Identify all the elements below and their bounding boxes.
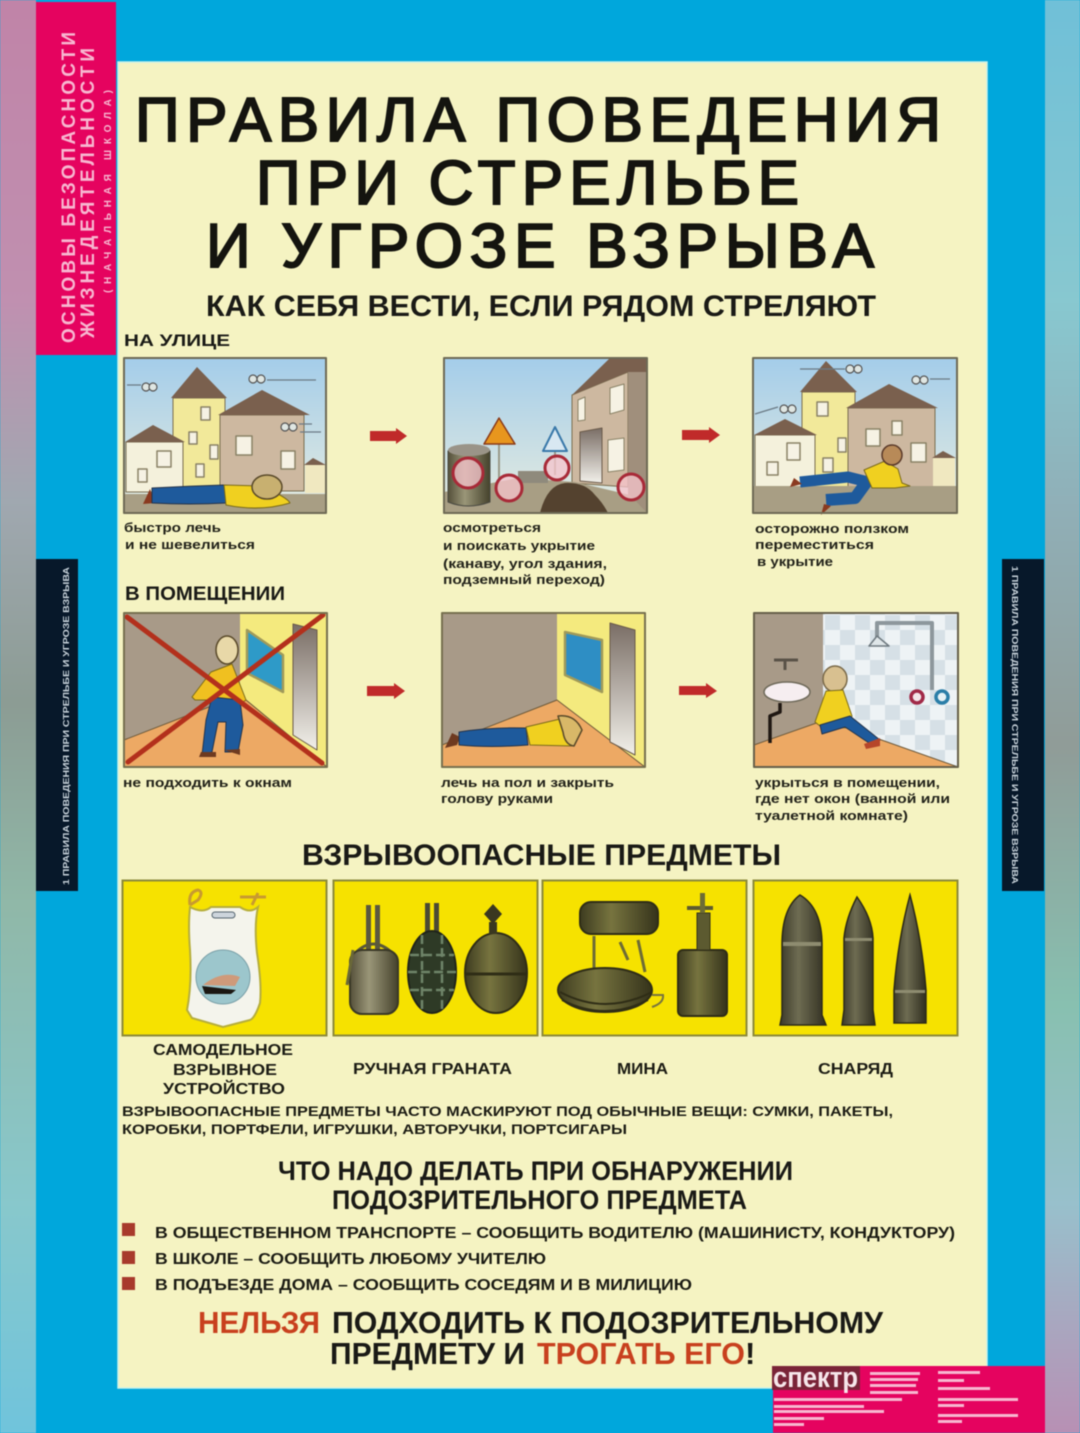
caption: look for cover: осмотреться bbox=[443, 520, 541, 535]
arrow bbox=[370, 428, 407, 444]
caption: lie down: и не шевелиться bbox=[125, 537, 255, 552]
warning text: ! bbox=[745, 1336, 755, 1371]
background: side gradient right bbox=[1045, 0, 1080, 1433]
publisher block bbox=[772, 1362, 1045, 1433]
title: ПРАВИЛА ПОВЕДЕНИЯ bbox=[135, 86, 941, 155]
caption: look for cover bbox=[443, 520, 607, 587]
heading: what to do: ПОДОЗРИТЕЛЬНОГО ПРЕДМЕТА bbox=[332, 1185, 747, 1215]
caption: lie on floor bbox=[441, 775, 614, 806]
panel: indoors, do not approach window bbox=[124, 613, 327, 767]
heading: indoors: В ПОМЕЩЕНИИ bbox=[125, 584, 285, 605]
caption: look for cover: подземный переход) bbox=[443, 572, 605, 587]
side tab: course name: (НАЧАЛЬНАЯ ШКОЛА) bbox=[103, 90, 114, 293]
labels: explosive objects bbox=[153, 1042, 894, 1098]
caption: bathroom: туалетной комнате) bbox=[755, 808, 908, 823]
labels: explosive objects: ВЗРЫВНОЕ bbox=[173, 1062, 277, 1079]
background: side gradient left bbox=[0, 0, 37, 1433]
list: what to do: В ШКОЛЕ – СООБЩИТЬ ЛЮБОМУ УЧИТЕЛЮ bbox=[155, 1251, 546, 1268]
panel: street, crawl bbox=[752, 358, 957, 515]
caption: crawl: осторожно ползком bbox=[755, 521, 909, 536]
panel: hand grenades bbox=[334, 880, 538, 1036]
heading: outdoors: НА УЛИЦЕ bbox=[124, 331, 230, 350]
side tab: left dark label: 1 ПРАВИЛА ПОВЕДЕНИЯ ПРИ СТРЕЛЬБЕ И УГРОЗЕ ВЗРЫВА bbox=[62, 567, 71, 885]
panel: indoors, bathroom bbox=[754, 613, 958, 767]
panel: street, look for cover bbox=[444, 358, 647, 513]
arrow bbox=[367, 683, 405, 699]
list: what to do: В ПОДЪЕЗДЕ ДОМА – СООБЩИТЬ СОСЕДЯМ И В МИЛИЦИЮ bbox=[155, 1277, 692, 1294]
warning text: ПОДХОДИТЬ К ПОДОЗРИТЕЛЬНОМУ bbox=[332, 1305, 884, 1340]
note: disguised objects: КОРОБКИ, ПОРТФЕЛИ, ИГРУШКИ, АВТОРУЧКИ, ПОРТСИГАРЫ bbox=[122, 1121, 627, 1137]
caption: lie on floor: лечь на пол и закрыть bbox=[441, 775, 614, 790]
caption: do not approach window: не подходить к окнам bbox=[123, 775, 292, 790]
labels: explosive objects: МИНА bbox=[617, 1061, 668, 1078]
panel: improvised device bbox=[122, 880, 326, 1036]
title: ПРИ СТРЕЛЬБЕ bbox=[256, 149, 799, 218]
panel: street, lie down bbox=[124, 358, 326, 513]
caption: lie down: быстро лечь bbox=[124, 520, 221, 535]
side tab: course name: ЖИЗНЕДЕЯТЕЛЬНОСТИ bbox=[78, 48, 99, 339]
caption: lie down bbox=[124, 520, 255, 552]
panel: shells bbox=[754, 880, 958, 1036]
side tab: course name bbox=[36, 2, 116, 355]
caption: bathroom bbox=[755, 775, 950, 823]
panel: mines bbox=[542, 880, 746, 1036]
arrow bbox=[679, 683, 717, 698]
warning text bbox=[198, 1305, 884, 1371]
note: disguised objects: ВЗРЫВООПАСНЫЕ ПРЕДМЕТЫ ЧАСТО МАСКИРУЮТ ПОД ОБЫЧНЫЕ ВЕЩИ: СУМКИ, ПАКЕТЫ, bbox=[122, 1103, 893, 1119]
side tab: right dark label: 1 ПРАВИЛА ПОВЕДЕНИЯ ПРИ СТРЕЛЬБЕ И УГРОЗЕ ВЗРЫВА bbox=[1010, 566, 1019, 884]
labels: explosive objects: РУЧНАЯ ГРАНАТА bbox=[353, 1061, 512, 1078]
caption: crawl: переместиться bbox=[755, 537, 874, 552]
side tab: course name: ОСНОВЫ БЕЗОПАСНОСТИ bbox=[59, 32, 80, 343]
title: И УГРОЗЕ ВЗРЫВА bbox=[206, 212, 875, 281]
cream poster panel bbox=[118, 62, 987, 1388]
warning text: ТРОГАТЬ ЕГО bbox=[537, 1336, 745, 1371]
arrow bbox=[682, 427, 720, 443]
panel: indoors, lie on floor bbox=[442, 613, 645, 767]
labels: explosive objects: САМОДЕЛЬНОЕ bbox=[153, 1042, 293, 1059]
publisher block: спектр bbox=[773, 1362, 858, 1394]
caption: bathroom: укрыться в помещении, bbox=[755, 775, 940, 790]
caption: look for cover: и поискать укрытие bbox=[443, 538, 595, 553]
labels: explosive objects: СНАРЯД bbox=[818, 1061, 894, 1078]
labels: explosive objects: УСТРОЙСТВО bbox=[163, 1079, 285, 1098]
list: what to do bbox=[122, 1223, 955, 1294]
subtitle: shooting: КАК СЕБЯ ВЕСТИ, ЕСЛИ РЯДОМ СТРЕЛЯЮТ bbox=[206, 290, 876, 323]
heading: what to do bbox=[278, 1156, 793, 1215]
note: disguised objects bbox=[122, 1103, 893, 1137]
caption: bathroom: где нет окон (ванной или bbox=[755, 791, 950, 806]
list: what to do: В ОБЩЕСТВЕННОМ ТРАНСПОРТЕ – СООБЩИТЬ ВОДИТЕЛЮ (МАШИНИСТУ, КОНДУКТОРУ) bbox=[155, 1225, 955, 1242]
heading: what to do: ЧТО НАДО ДЕЛАТЬ ПРИ ОБНАРУЖЕНИИ bbox=[278, 1156, 793, 1186]
side tab: left dark label bbox=[36, 559, 78, 891]
title bbox=[135, 86, 941, 281]
caption: crawl bbox=[755, 521, 909, 569]
heading: explosive objects: ВЗРЫВООПАСНЫЕ ПРЕДМЕТЫ bbox=[302, 839, 781, 872]
side tab: right dark label bbox=[1002, 559, 1044, 891]
warning text: НЕЛЬЗЯ bbox=[198, 1305, 320, 1340]
caption: crawl: в укрытие bbox=[757, 554, 833, 569]
caption: look for cover: (канаву, угол здания, bbox=[443, 556, 607, 571]
caption: lie on floor: голову руками bbox=[441, 791, 553, 806]
warning text: ПРЕДМЕТУ И bbox=[330, 1336, 525, 1371]
